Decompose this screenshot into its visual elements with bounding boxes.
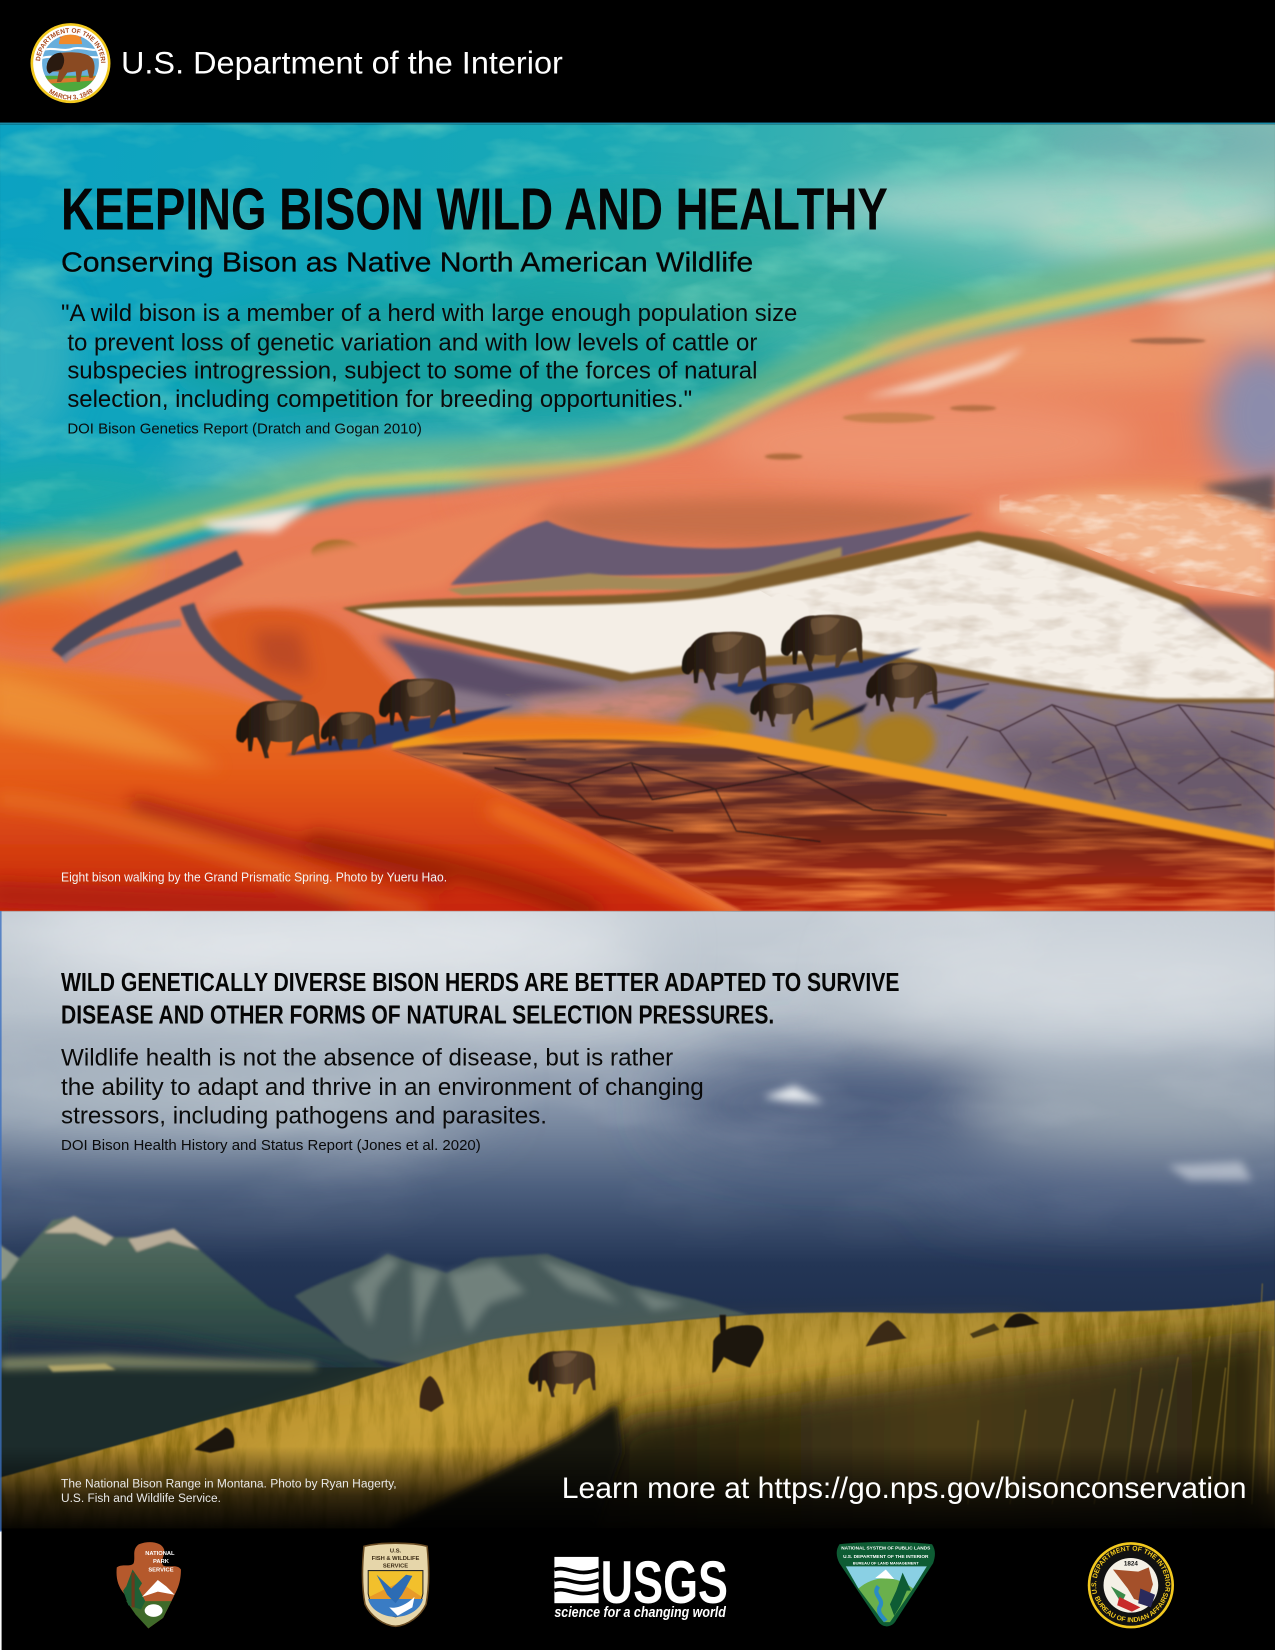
photo caption: Grand Prismatic: Eight bison walking by the Grand Prismatic Spring. Photo by Yueru Hao.	[61, 871, 447, 885]
body source: DOI Bison Health History and Status Report (Jones et al. 2020)	[61, 1138, 481, 1154]
logo: USGS	[554, 1549, 728, 1621]
bison: left walking group	[236, 678, 456, 758]
bison shadows	[286, 648, 987, 755]
quote source: DOI Bison Genetics Report (Dratch and Gogan 2010)	[67, 421, 422, 437]
hillside shadow	[546, 1305, 1275, 1526]
logo: National Park Service: NATIONAL	[145, 1551, 175, 1557]
logo: USGS: science for a changing world	[554, 1605, 727, 1621]
icon: Department of the Interior seal	[30, 23, 110, 104]
logo: Fish and Wildlife Service: U.S.	[390, 1549, 402, 1555]
icon: Department of the Interior seal: MARCH 3, 1849	[48, 88, 92, 100]
section heading: WILD GENETICALLY DIVERSE BISON HERDS ARE BETTER ADAPTED TO SURVIVE	[61, 967, 899, 997]
quote: wild bison definition: selection, including competition for breeding opportunities."	[67, 387, 692, 413]
left lava field	[0, 657, 747, 926]
bison on the hillside	[195, 1313, 1039, 1453]
seam line	[0, 911, 2, 1532]
logo: Bureau of Land Management: U.S. DEPARTMENT OF THE INTERIOR	[843, 1554, 929, 1560]
cracked purple mineral flat	[394, 644, 1275, 850]
header bar	[0, 0, 1275, 124]
logo: Bureau of Indian Affairs	[1088, 1542, 1174, 1628]
logo: Bureau of Land Management: BUREAU OF LAND MANAGEMENT	[853, 1560, 919, 1565]
photo: National Bison Range	[0, 905, 1275, 1546]
body text: wildlife health	[61, 1045, 704, 1129]
section heading: DISEASE AND OTHER FORMS OF NATURAL SELECTION PRESSURES.	[61, 1000, 774, 1030]
section heading	[61, 967, 899, 1030]
logo: National Park Service: SERVICE	[148, 1568, 174, 1574]
white mineral flat	[342, 531, 1275, 703]
body text: wildlife health: Wildlife health is not the absence of disease, but is rather	[61, 1045, 673, 1072]
photo caption: Bison Range: U.S. Fish and Wildlife Service.	[61, 1491, 221, 1505]
quote: wild bison definition: "A wild bison is a member of a herd with large enough population size	[61, 301, 797, 327]
logo: Bureau of Indian Affairs: BUREAU OF INDIAN AFFAIRS	[1094, 1592, 1168, 1622]
dark reflecting pool	[391, 737, 1275, 911]
valley floor	[2, 1368, 394, 1476]
bison: right walking group	[682, 615, 938, 727]
logo: Bureau of Land Management: NATIONAL SYSTEM OF PUBLIC LANDS	[841, 1546, 930, 1552]
photo: Grand Prismatic Spring	[0, 124, 1275, 926]
grey-purple channels	[58, 558, 300, 703]
logo: Bureau of Indian Affairs: U.S. DEPARTMENT OF THE INTERIOR	[1091, 1546, 1170, 1594]
logo: National Park Service: PARK	[153, 1559, 170, 1565]
golden hillside	[0, 1300, 1275, 1546]
white mineral flecks	[200, 271, 1275, 532]
logo: Fish and Wildlife Service	[363, 1543, 429, 1626]
quote: wild bison definition: subspecies introgression, subject to some of the forces of natural	[67, 359, 757, 385]
header title: U.S. Department of the Interior	[121, 45, 563, 81]
main heading: KEEPING BISON WILD AND HEALTHY	[61, 177, 888, 242]
link: learn more: Learn more at https://go.nps.gov/bisonconservation	[562, 1472, 1247, 1505]
photo caption: Bison Range: The National Bison Range in Montana. Photo by Ryan Hagerty,	[61, 1476, 397, 1490]
logo: Fish and Wildlife Service: FISH & WILDLIFE	[372, 1556, 420, 1562]
mountains	[0, 1214, 747, 1368]
logo: Bureau of Land Management	[837, 1542, 935, 1626]
body text: wildlife health: the ability to adapt and thrive in an environment of changing	[61, 1074, 704, 1101]
logo: USGS: USGS	[601, 1549, 728, 1616]
body text: wildlife health: stressors, including pathogens and parasites.	[61, 1102, 547, 1129]
logo: National Park Service	[117, 1542, 181, 1628]
orange mineral ridge	[391, 723, 1275, 850]
photo caption: Bison Range	[61, 1476, 397, 1505]
quote: wild bison definition: to prevent loss of genetic variation and with low levels of cattle or	[67, 330, 758, 356]
right rim	[989, 494, 1275, 600]
subheading: Conserving Bison as Native North American Wildlife	[61, 246, 753, 277]
footer bar	[0, 1528, 1275, 1650]
logo: Fish and Wildlife Service: SERVICE	[383, 1563, 408, 1569]
quote: wild bison definition	[61, 301, 797, 413]
logo: Bureau of Indian Affairs: 1824	[1124, 1560, 1138, 1567]
